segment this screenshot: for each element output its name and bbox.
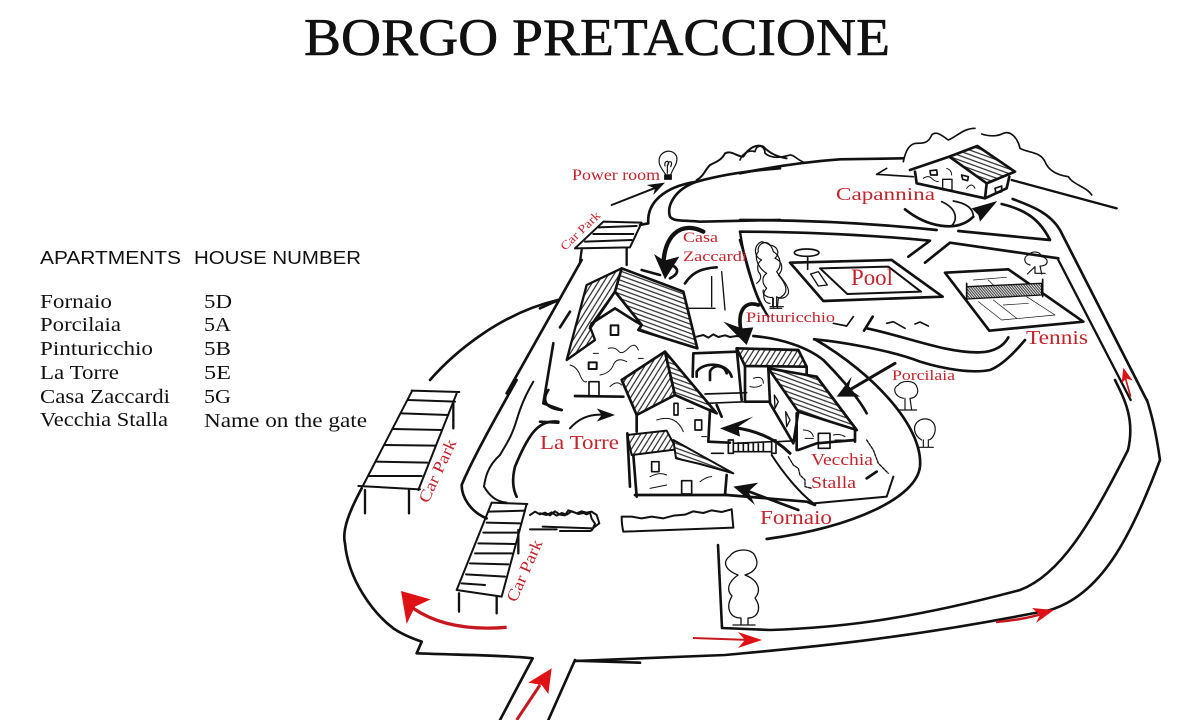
- map labels: Pool: [851, 265, 893, 290]
- surrounding lines: [540, 240, 920, 539]
- map labels: Car Park: [502, 536, 547, 605]
- tennis court: [945, 269, 1083, 331]
- apartment table: HOUSE NUMBER: [194, 247, 361, 268]
- building: Pinturicchio: [737, 348, 807, 402]
- red arrow: entrance: [517, 668, 552, 720]
- map labels: Capannina: [836, 184, 935, 204]
- apartment table: Name on the gate: [204, 410, 367, 432]
- red arrow: south-east road: [996, 608, 1054, 623]
- apartment table: Fornaio: [40, 291, 112, 313]
- arrow: la torre: [570, 408, 615, 428]
- tree: [726, 550, 759, 625]
- apartment table: 5B: [204, 338, 231, 360]
- outer road and entrance: [344, 300, 640, 720]
- north road, power room, car park: [507, 146, 787, 393]
- title: BORGO PRETACCIONE: [304, 9, 890, 67]
- map labels: [414, 167, 1088, 605]
- building: Casa Zaccardi: [567, 268, 697, 397]
- map labels: Zaccardi: [683, 249, 747, 265]
- apartment table: Porcilaia: [40, 314, 121, 336]
- building: gate arch: [693, 352, 747, 403]
- apartment table: 5A: [204, 314, 231, 336]
- arrow: capannina: [905, 201, 997, 227]
- apartment table: 5G: [204, 386, 231, 408]
- tree: [915, 419, 935, 447]
- map labels: Car Park: [557, 208, 603, 253]
- tree: [756, 243, 786, 308]
- tree: [1025, 252, 1047, 274]
- map labels: Tennis: [1026, 327, 1088, 349]
- red arrow: south road: [693, 632, 762, 648]
- apartment table: APARTMENTS: [40, 247, 181, 268]
- pool: [790, 249, 943, 301]
- arrow: gate: [720, 417, 790, 453]
- car park north: [575, 222, 642, 265]
- map labels: La Torre: [540, 432, 619, 454]
- apartment table: Pinturicchio: [40, 338, 153, 360]
- arrow: casa zaccardi: [654, 228, 703, 279]
- capannina: [877, 128, 1092, 198]
- car park south: [457, 503, 527, 613]
- map labels: Vecchia: [811, 450, 874, 469]
- roads and car parks, south-west: [344, 300, 640, 720]
- tree: [755, 242, 789, 307]
- north-east: pool, tennis, capannina: [740, 128, 1147, 400]
- arrow: porcilaia: [837, 363, 895, 397]
- map labels: Casa: [683, 230, 718, 246]
- arrow: fornaio: [733, 483, 798, 510]
- map labels: Stalla: [811, 473, 857, 492]
- icon: light bulb: [659, 151, 677, 179]
- apartment table: [40, 247, 367, 432]
- red arrow: car park: [401, 591, 507, 628]
- arrow: pinturicchio: [723, 304, 758, 345]
- map labels: Pinturicchio: [746, 310, 835, 326]
- building: La Torre: [622, 352, 730, 443]
- village buildings: [540, 240, 935, 539]
- apartment table: 5D: [204, 291, 232, 313]
- roads: [740, 146, 1147, 400]
- map labels: Power room: [572, 167, 660, 184]
- red arrow: east road: [1122, 368, 1133, 397]
- south-east road: [575, 380, 1160, 661]
- car park west: [358, 391, 459, 513]
- tree: [895, 381, 918, 410]
- apartment table: 5E: [204, 362, 231, 384]
- arrow: power room: [612, 183, 665, 205]
- map labels: Porcilaia: [892, 368, 955, 384]
- map labels: Fornaio: [760, 507, 832, 529]
- gate: [712, 440, 797, 453]
- building: Vecchia Stalla: [768, 368, 857, 450]
- map labels: Car Park: [414, 435, 461, 506]
- building: Fornaio: [627, 431, 733, 497]
- apartment table: La Torre: [40, 362, 119, 384]
- apartment table: Casa Zaccardi: [40, 386, 170, 408]
- apartment table: Vecchia Stalla: [40, 409, 168, 431]
